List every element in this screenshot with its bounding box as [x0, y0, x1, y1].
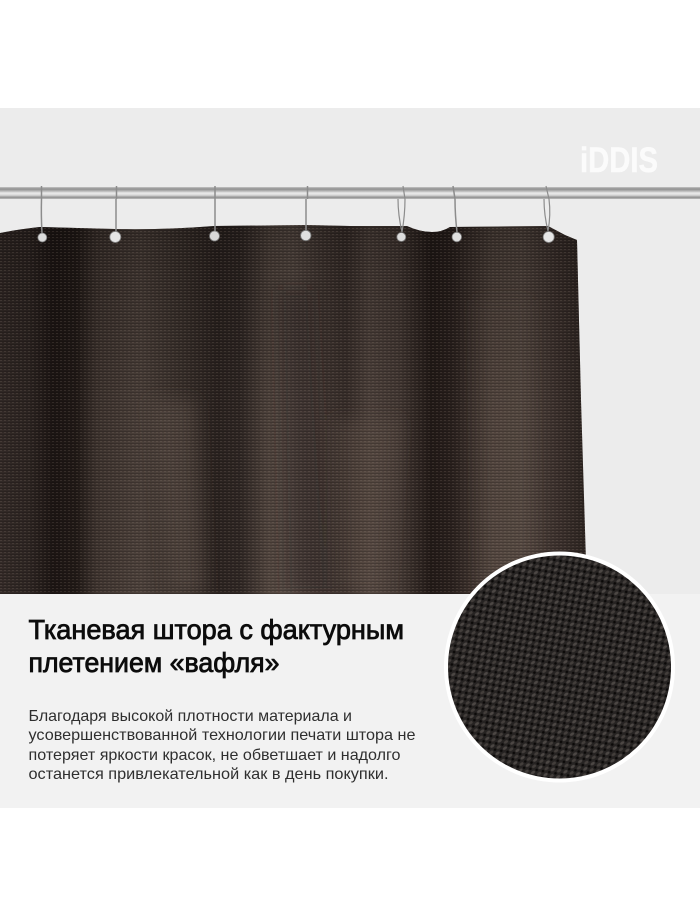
body text: усовершенствованной технологии печати штора не: [28, 727, 416, 744]
body text: останется привлекательной как в день покупки.: [28, 766, 389, 783]
curtain fabric: [0, 220, 590, 596]
text panel background: [0, 594, 700, 808]
body text: потеряет яркости красок, не обветшает и надолго: [28, 747, 401, 764]
hook 2: [110, 186, 121, 242]
body text: [28, 708, 416, 783]
hook 5: [397, 186, 406, 242]
heading: Тканевая штора с фактурным: [28, 614, 404, 645]
photo backdrop panel: [0, 108, 700, 594]
heading: плетением «вафля»: [28, 647, 280, 678]
curtain hooks and grommets: [38, 186, 554, 242]
hook 6: [452, 186, 462, 242]
curtain rod: [0, 187, 700, 199]
fabric close-up lens: [444, 552, 675, 782]
hook 7: [543, 186, 554, 242]
logo: iDDIS: iDDIS: [580, 141, 658, 180]
hook 1: [38, 186, 47, 242]
body text: Благодаря высокой плотности материала и: [28, 708, 352, 725]
fold shading: [156, 288, 391, 594]
hook 3: [210, 186, 220, 241]
heading: [28, 614, 404, 678]
hook 4: [301, 186, 311, 241]
